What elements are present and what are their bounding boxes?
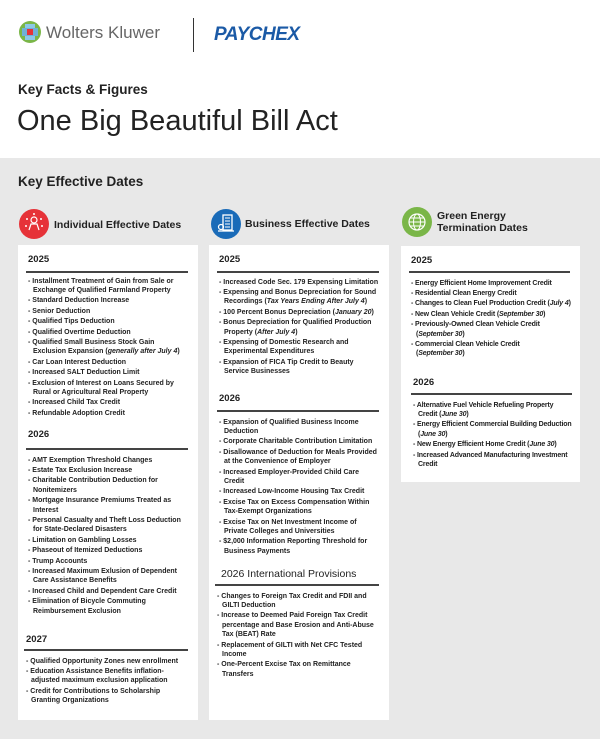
logo: Wolters Kluwer: Wolters Kluwer bbox=[46, 23, 160, 42]
2025 individual: Standard Deduction Increase bbox=[32, 297, 129, 304]
2025 business bbox=[217, 254, 379, 375]
2026 individual: Limitation on Gambling Losses bbox=[32, 537, 137, 544]
2026 green: Energy Efficient Commercial Building Deduction (June 30) bbox=[417, 421, 572, 438]
2025 business: Expensing of Domestic Research and Experimental Expenditures bbox=[223, 339, 349, 355]
2026 individual: Mortgage Insurance Premiums Treated as Interest bbox=[32, 497, 171, 514]
2025 individual: Increased SALT Deduction Limit bbox=[32, 369, 140, 376]
2026 individual bbox=[26, 429, 188, 615]
2026 business bbox=[217, 393, 379, 555]
2027 individual: 2027 bbox=[26, 634, 47, 645]
2026 business: $2,000 Information Reporting Threshold for Business Payments bbox=[223, 538, 367, 555]
icon: individual bbox=[19, 209, 49, 239]
2025 business: Increased Code Sec. 179 Expensing Limitation bbox=[223, 278, 378, 286]
2025 green: 2025 bbox=[411, 255, 432, 266]
2025 green: Energy Efficient Home Improvement Credit bbox=[415, 280, 552, 286]
2026 business: Excise Tax on Net Investment Income of Private Colleges and Universities bbox=[223, 519, 357, 535]
2027 individual: Qualified Opportunity Zones new enrollment bbox=[30, 658, 178, 664]
logo: Paychex: PAYCHEX bbox=[214, 24, 300, 45]
2026 business: 2026 bbox=[219, 393, 240, 404]
2026 individual: Phaseout of Itemized Deductions bbox=[32, 547, 142, 554]
2026 business: Increased Low-Income Housing Tax Credit bbox=[223, 488, 364, 495]
2025 green: Commercial Clean Vehicle Credit bbox=[415, 341, 520, 348]
2027 individual: Education Assistance Benefits inflation-adjusted maximum exclusion application bbox=[30, 668, 168, 684]
2027 individual: Credit for Contributions to Scholarship Granting Organizations bbox=[30, 688, 160, 704]
2026 green: New Energy Efficient Home Credit (June 30) bbox=[417, 441, 557, 448]
panel: business bbox=[209, 245, 389, 720]
icon: business bbox=[211, 209, 241, 239]
2026 business: Increased Employer-Provided Child Care Credit bbox=[223, 469, 359, 485]
icon: green energy bbox=[402, 207, 432, 237]
2025 green: Changes to Clean Fuel Production Credit (July 4) bbox=[415, 300, 571, 307]
2026 individual: AMT Exemption Threshold Changes bbox=[32, 456, 152, 464]
2026 individual: Increased Child and Dependent Care Credit bbox=[32, 588, 177, 595]
2026 business: Excise Tax on Excess Compensation Within Tax-Exempt Organizations bbox=[223, 499, 369, 515]
2025 individual: Qualified Tips Deduction bbox=[32, 318, 115, 325]
panel: individual bbox=[18, 245, 198, 720]
title: One Big Beautiful Bill Act bbox=[17, 105, 338, 137]
2026 individual: Increased Maximum Exlusion of Dependent Care Assistance Benefits bbox=[32, 568, 177, 584]
2026 green: Alternative Fuel Vehicle Refueling Property Credit (June 30) bbox=[417, 402, 553, 418]
2026 business: Expansion of Qualified Business Income Deduction bbox=[223, 418, 359, 435]
2025 green: Previously-Owned Clean Vehicle Credit bbox=[415, 321, 540, 328]
2025 business: Expensing and Bonus Depreciation for Sound Recordings (Tax Years Ending After July 4) bbox=[223, 289, 376, 305]
2025 business: Expansion of FICA Tip Credit to Beauty Service Businesses bbox=[223, 359, 354, 375]
heading: green energy: Green Energy bbox=[437, 210, 506, 222]
2026 green: 2026 bbox=[413, 377, 434, 388]
2026 international: One-Percent Excise Tax on Remittance Transfers bbox=[221, 661, 351, 678]
2026 business: Corporate Charitable Contribution Limitation bbox=[223, 438, 372, 445]
2025 individual: Refundable Adoption Credit bbox=[32, 410, 125, 417]
2026 international bbox=[215, 568, 379, 678]
2026 individual: Estate Tax Exclusion Increase bbox=[32, 467, 132, 474]
2026 individual: Personal Casualty and Theft Loss Deduction for State-Declared Disasters bbox=[32, 517, 181, 533]
2026 individual: Elimination of Bicycle Commuting Reimbursement Exclusion bbox=[32, 598, 146, 615]
2025 individual: Qualified Small Business Stock Gain Exclusion Expansion (generally after July 4) bbox=[32, 339, 180, 355]
2025 individual: Qualified Overtime Deduction bbox=[32, 329, 131, 336]
2026 business: Disallowance of Deduction for Meals Provided at the Convenience of Employer bbox=[223, 449, 377, 465]
2025 green bbox=[409, 255, 571, 357]
2025 business: 100 Percent Bonus Depreciation (January 20) bbox=[223, 309, 374, 316]
heading: individual: Individual Effective Dates bbox=[54, 219, 181, 231]
2025 individual: 2025 bbox=[28, 254, 49, 265]
2025 green: Residential Clean Energy Credit bbox=[415, 290, 517, 297]
2025 individual: Exclusion of Interest on Loans Secured by Rural or Agricultural Real Property bbox=[32, 380, 174, 396]
2026 individual: Trump Accounts bbox=[32, 558, 87, 565]
2025 green: New Clean Vehicle Credit (September 30) bbox=[415, 311, 545, 318]
heading: green energy bbox=[437, 210, 528, 234]
2026 green: Increased Advanced Manufacturing Investment Credit bbox=[417, 452, 567, 468]
section heading: Key Effective Dates bbox=[18, 174, 143, 189]
heading: business: Business Effective Dates bbox=[245, 218, 370, 230]
2027 individual bbox=[24, 634, 188, 704]
2025 individual: Installment Treatment of Gain from Sale or Exchange of Qualified Farmland Property bbox=[32, 278, 173, 294]
2026 individual: Charitable Contribution Deduction for Nonitemizers bbox=[32, 477, 158, 494]
2025 individual: Car Loan Interest Deduction bbox=[32, 359, 126, 366]
2025 green: (September 30) bbox=[416, 331, 464, 338]
2026 international: 2026 International Provisions bbox=[221, 568, 356, 580]
heading: green energy: Termination Dates bbox=[437, 222, 528, 234]
2026 green bbox=[411, 377, 572, 468]
2026 international: Changes to Foreign Tax Credit and FDII and GILTI Deduction bbox=[221, 592, 367, 609]
2026 international: Increase to Deemed Paid Foreign Tax Credit percentage and Base Erosion and Anti-Abuse Tax (BEAT) Rate bbox=[221, 612, 374, 638]
2025 business: Bonus Depreciation for Qualified Production Property (After July 4) bbox=[223, 319, 371, 336]
2025 green: (September 30) bbox=[416, 350, 464, 357]
logo: Wolters Kluwer bbox=[19, 21, 160, 43]
2026 international: Replacement of GILTI with Net CFC Tested Income bbox=[221, 642, 362, 658]
2026 individual: 2026 bbox=[28, 429, 49, 440]
2025 individual: Senior Deduction bbox=[32, 308, 90, 315]
panel: green energy bbox=[401, 246, 580, 482]
subtitle: Key Facts & Figures bbox=[18, 82, 148, 97]
2025 business: 2025 bbox=[219, 254, 240, 265]
2025 individual bbox=[26, 254, 188, 417]
2025 individual: Increased Child Tax Credit bbox=[32, 399, 120, 406]
